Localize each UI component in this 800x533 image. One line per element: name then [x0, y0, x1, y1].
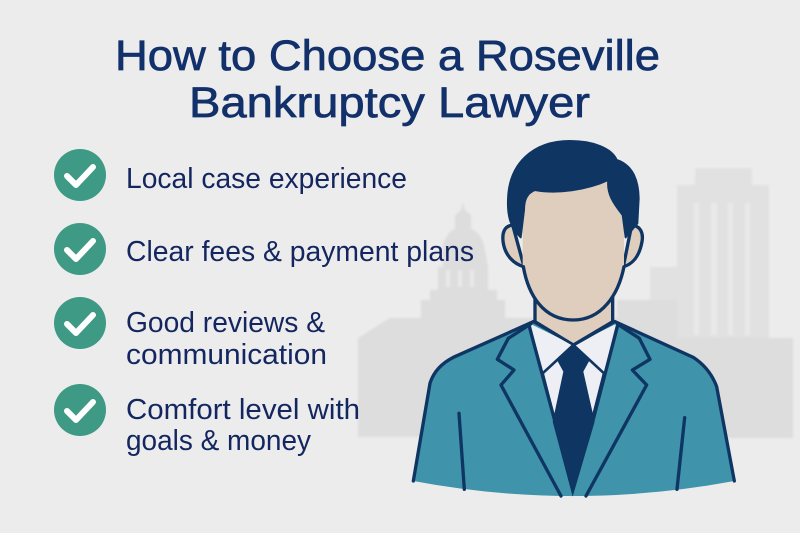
item: clear fees and payment plans: Clear fees & payment plans	[126, 236, 474, 268]
ears	[503, 225, 642, 267]
checklist	[54, 149, 474, 457]
tie	[553, 346, 595, 497]
sleeve lines	[459, 413, 685, 489]
hair	[508, 141, 639, 237]
title: How to Choose a Roseville	[115, 32, 660, 80]
left lapel	[497, 324, 573, 496]
item: good reviews and communication: Good reviews &	[126, 307, 325, 339]
title	[115, 32, 660, 127]
face	[523, 180, 624, 320]
shirt collar	[531, 324, 616, 422]
title: Bankruptcy Lawyer	[189, 79, 590, 127]
item: comfort level with goals and money: goals & money	[126, 425, 312, 457]
item: local case experience: Local case experience	[126, 163, 407, 195]
background skyline	[358, 168, 793, 438]
item: clear fees and payment plans	[54, 223, 474, 275]
icon: lawyer figure	[413, 141, 734, 497]
item: comfort level with goals and money: Comfort level with	[126, 394, 360, 426]
item: good reviews and communication: communication	[126, 339, 327, 371]
item: comfort level with goals and money	[54, 384, 360, 457]
right lapel	[573, 324, 650, 496]
neck	[535, 297, 613, 345]
jacket	[413, 322, 734, 496]
item: local case experience	[54, 149, 407, 201]
item: good reviews and communication	[54, 297, 327, 371]
